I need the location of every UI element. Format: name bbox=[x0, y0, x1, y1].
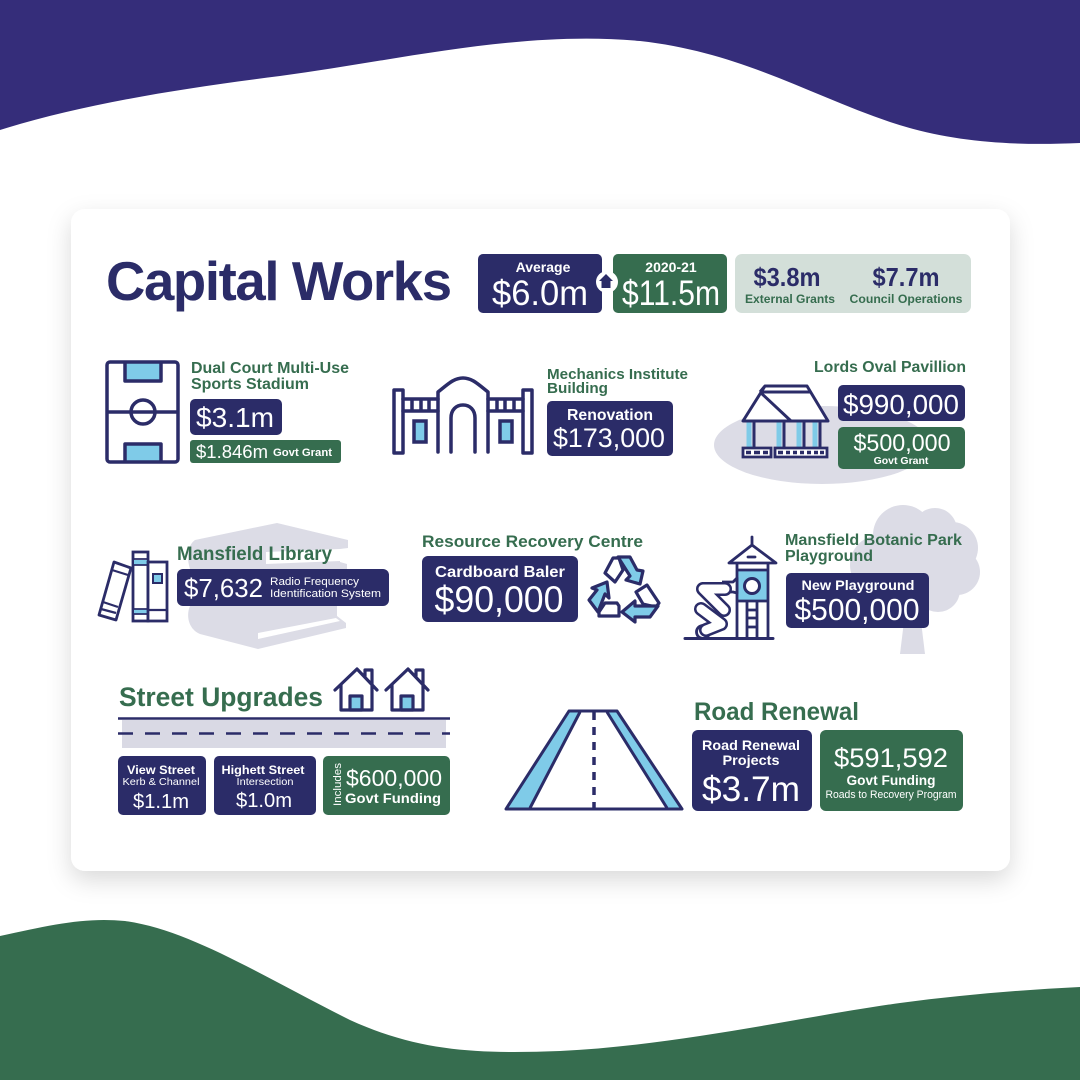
mechanics cost: Renovation bbox=[567, 407, 653, 424]
highett street bbox=[214, 756, 316, 815]
stadium grant: $1.846m bbox=[196, 441, 268, 462]
library cost: Radio Frequency bbox=[270, 576, 360, 588]
funding split panel: $3.8m bbox=[754, 262, 820, 292]
playground heading: Mansfield Botanic Park bbox=[785, 532, 962, 549]
mechanics cost: $173,000 bbox=[553, 423, 665, 453]
icon: houses bbox=[335, 669, 428, 710]
icon: books bbox=[99, 552, 167, 621]
road projects: $3.7m bbox=[702, 769, 800, 809]
pavilion grant: $500,000 bbox=[854, 430, 950, 457]
highett street: Intersection bbox=[236, 776, 294, 788]
library heading: Mansfield Library bbox=[177, 544, 332, 565]
street funding: Includes bbox=[332, 762, 344, 806]
main card bbox=[71, 209, 1010, 871]
view street bbox=[118, 756, 206, 815]
stadium grant bbox=[190, 440, 341, 463]
recovery heading: Resource Recovery Centre bbox=[422, 532, 643, 551]
pavilion grant: Govt Grant bbox=[874, 455, 929, 467]
recovery cost: Cardboard Baler bbox=[435, 564, 565, 581]
road funding: Govt Funding bbox=[846, 772, 936, 788]
funding split panel: Council Operations bbox=[850, 292, 963, 306]
pavilion cost: $990,000 bbox=[843, 389, 959, 420]
playground cost bbox=[786, 573, 929, 628]
stat: average: $6.0m bbox=[492, 274, 588, 313]
library cost: $7,632 bbox=[184, 573, 263, 603]
street graphic bbox=[118, 718, 450, 748]
pavilion backdrop bbox=[714, 406, 930, 484]
highett street: Highett Street bbox=[222, 763, 304, 777]
icon: road bbox=[506, 711, 682, 809]
stadium heading: Sports Stadium bbox=[191, 376, 309, 393]
icon: mechanics institute bbox=[394, 378, 532, 453]
mechanics heading: Mechanics Institute bbox=[547, 366, 688, 383]
view street: Kerb & Channel bbox=[122, 776, 200, 788]
street funding: Govt Funding bbox=[345, 790, 441, 806]
recovery cost: $90,000 bbox=[434, 579, 564, 620]
playground cost: New Playground bbox=[802, 577, 914, 593]
street upgrades heading: Street Upgrades bbox=[119, 682, 323, 712]
view street: $1.1m bbox=[133, 791, 189, 813]
street funding: $600,000 bbox=[346, 765, 442, 791]
pavilion grant bbox=[838, 427, 965, 469]
stat: 2020-21: 2020-21 bbox=[645, 259, 697, 275]
icon: recycle bbox=[589, 557, 659, 622]
highett street: $1.0m bbox=[236, 790, 292, 812]
stat: average: Average bbox=[516, 259, 571, 275]
mechanics cost bbox=[547, 401, 673, 456]
funding split panel: $7.7m bbox=[872, 262, 940, 292]
road funding: Roads to Recovery Program bbox=[826, 789, 956, 801]
stadium heading: Dual Court Multi-Use bbox=[191, 360, 349, 377]
title: Capital Works bbox=[106, 251, 452, 312]
mechanics heading: Building bbox=[547, 380, 608, 397]
library backdrop: stacked books bbox=[188, 523, 348, 649]
top wave bbox=[0, 0, 1080, 144]
tree backdrop bbox=[850, 505, 980, 654]
icon: sports court bbox=[107, 362, 178, 462]
icon: playground bbox=[685, 537, 776, 638]
street funding bbox=[323, 756, 450, 815]
stadium cost: $3.1m bbox=[196, 402, 274, 433]
bottom wave bbox=[0, 920, 1080, 1080]
pavilion heading: Lords Oval Pavillion bbox=[814, 359, 966, 376]
stat: 2020-21 bbox=[613, 254, 727, 313]
road funding bbox=[820, 730, 963, 811]
view street: View Street bbox=[127, 763, 195, 777]
road funding: $591,592 bbox=[834, 743, 948, 773]
playground cost: $500,000 bbox=[794, 593, 920, 627]
road renewal heading: Road Renewal bbox=[694, 698, 859, 726]
playground heading: Playground bbox=[785, 548, 873, 565]
funding split panel bbox=[735, 254, 971, 313]
icon: pavilion bbox=[743, 386, 828, 457]
recovery cost bbox=[422, 556, 578, 622]
stat: average bbox=[478, 254, 602, 313]
stat: 2020-21: $11.5m bbox=[622, 274, 720, 313]
road projects: Projects bbox=[722, 752, 780, 768]
road projects: Road Renewal bbox=[702, 737, 800, 753]
funding split panel: External Grants bbox=[745, 292, 835, 306]
road projects bbox=[692, 730, 812, 811]
stadium grant: Govt Grant bbox=[273, 447, 332, 459]
icon: house connector bbox=[596, 271, 618, 293]
library cost bbox=[177, 569, 389, 606]
library cost: Identification System bbox=[270, 588, 381, 600]
